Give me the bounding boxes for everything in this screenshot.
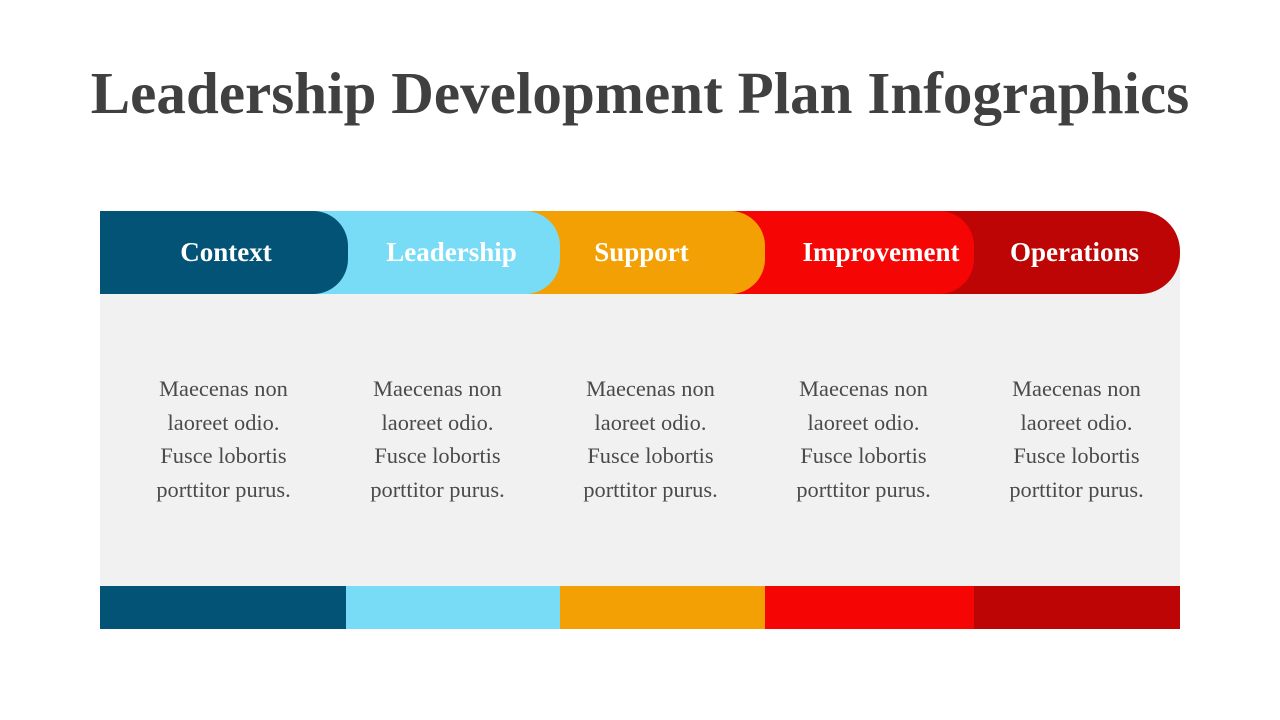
text block: leadership [370,376,505,502]
text block: context: Maecenas non [159,376,288,401]
footer bar: leadership [346,586,560,629]
footer bar: operations [974,586,1180,629]
text block: support: Maecenas non [586,376,715,401]
text block: improvement: Fusce lobortis [800,443,927,468]
header tab: context [100,211,348,294]
text block: improvement [796,376,931,502]
heading: leadership: Leadership [386,237,517,267]
heading: support: Support [594,237,689,267]
header tab: leadership [300,211,560,294]
heading: improvement: Improvement [802,237,959,267]
text block: operations: Maecenas non [1012,376,1141,401]
header tab: support [500,211,765,294]
header tab: operations [900,211,1180,294]
text block: support [583,376,718,502]
footer bar: support [560,586,765,629]
text block: operations: laoreet odio. [1021,410,1132,435]
text block: operations [1009,376,1144,502]
text block: improvement: porttitor purus. [796,477,931,502]
text block: operations: porttitor purus. [1009,477,1144,502]
heading: context: Context [180,237,272,267]
text block: improvement: Maecenas non [799,376,928,401]
text block: leadership: Maecenas non [373,376,502,401]
title: Leadership Development Plan Infographics [91,60,1189,126]
text block: improvement: laoreet odio. [808,410,919,435]
footer bar: context [100,586,346,629]
text block: context: porttitor purus. [156,477,291,502]
text block: leadership: laoreet odio. [382,410,493,435]
text block: context: laoreet odio. [168,410,279,435]
text block: support: porttitor purus. [583,477,718,502]
text block: context [156,376,291,502]
text block: leadership: porttitor purus. [370,477,505,502]
panel: grey content background [100,250,1180,590]
text block: support: laoreet odio. [595,410,706,435]
header tab: improvement [700,211,974,294]
heading: operations: Operations [1010,237,1139,267]
text block: leadership: Fusce lobortis [374,443,501,468]
footer bar: improvement [765,586,974,629]
text block: context: Fusce lobortis [160,443,287,468]
text block: operations: Fusce lobortis [1013,443,1140,468]
text block: support: Fusce lobortis [587,443,714,468]
